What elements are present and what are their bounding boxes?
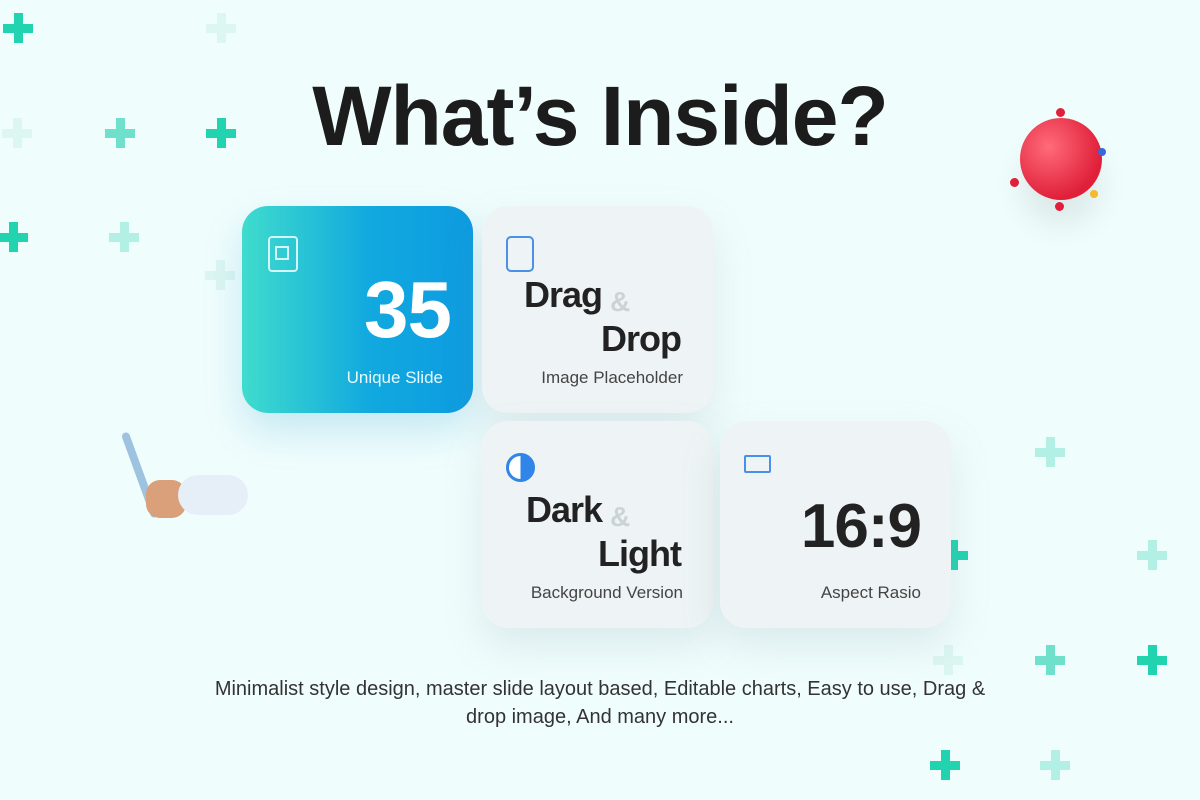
icon: monitor — [744, 455, 771, 473]
panel: aspect ratio: Aspect Rasio — [821, 583, 921, 602]
number 35: 35 — [364, 265, 451, 354]
panel: dark & light: Dark — [526, 489, 602, 530]
icon: half circle — [506, 453, 535, 482]
icon: hand with syringe — [122, 432, 248, 518]
panel: drag & drop — [482, 206, 713, 413]
panel: unique slide — [242, 206, 473, 413]
icon: virus — [1010, 108, 1106, 224]
description text: drop image, And many more... — [466, 706, 734, 728]
panel: aspect ratio: 16:9 — [801, 492, 921, 561]
icon: palette — [506, 236, 534, 272]
label: Unique Slide — [347, 368, 443, 387]
panel: aspect ratio — [720, 421, 951, 628]
panel: drag & drop: Drop — [601, 318, 681, 359]
panel: dark & light: Light — [598, 533, 681, 574]
description text: Minimalist style design, master slide layout based, Editable charts, Easy to use, Drag & — [215, 678, 985, 700]
panel: dark & light: & — [610, 501, 630, 532]
panel: drag & drop: Drag — [524, 274, 602, 315]
description text — [215, 678, 985, 728]
panel: dark & light: Background Version — [531, 583, 683, 602]
icon: document — [268, 236, 298, 272]
panel: drag & drop: & — [610, 286, 630, 317]
panel: dark & light — [482, 421, 713, 628]
title: What’s Inside? — [312, 69, 888, 163]
panel: drag & drop: Image Placeholder — [541, 368, 683, 387]
